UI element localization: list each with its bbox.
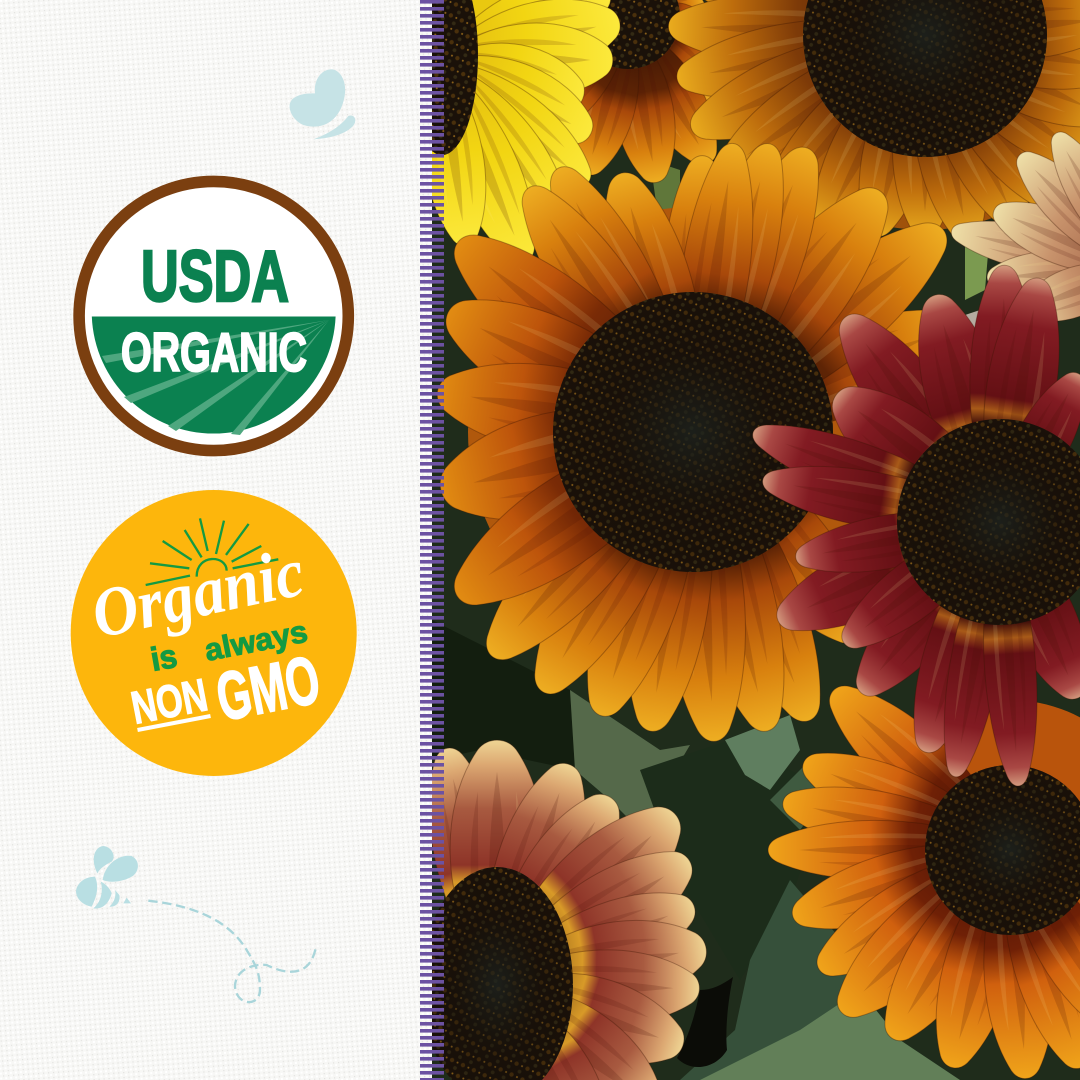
flower: main centre sunflower [428,133,978,744]
badge underline [138,716,210,730]
badge text: GMO: GMO [210,641,326,736]
flower: right red sunflower [744,265,1080,788]
seal text: ORGANIC: ORGANIC [121,321,307,383]
icon: bee with dashed flight path [76,846,316,1002]
badge text: always: always [202,614,310,668]
badge: Organic is always Non GMO [71,490,357,776]
purple stitched stripe border [420,0,444,1080]
foliage [432,160,1010,1080]
panel: linen background [0,0,432,1080]
badge: USDA Organic seal [79,181,348,451]
badge text: is: is [148,637,180,678]
bee flight path [148,901,316,1002]
photo: sunflowers [432,0,1080,1080]
flower: bottom right orange [768,665,1080,1080]
seal rays [102,320,329,435]
badge text: NON: NON [127,668,212,734]
icon: butterfly [290,69,355,139]
icon: rising sun [146,518,278,585]
flower: top yellow [432,0,620,255]
flower: top right orange [667,0,1080,249]
seal text: USDA: USDA [141,237,289,317]
flower: top middle orange [578,0,718,184]
badge text: Organic: Organic [85,534,311,654]
flower: pale petals upper right [950,131,1080,322]
flower: bottom left red and cream [413,740,713,1080]
